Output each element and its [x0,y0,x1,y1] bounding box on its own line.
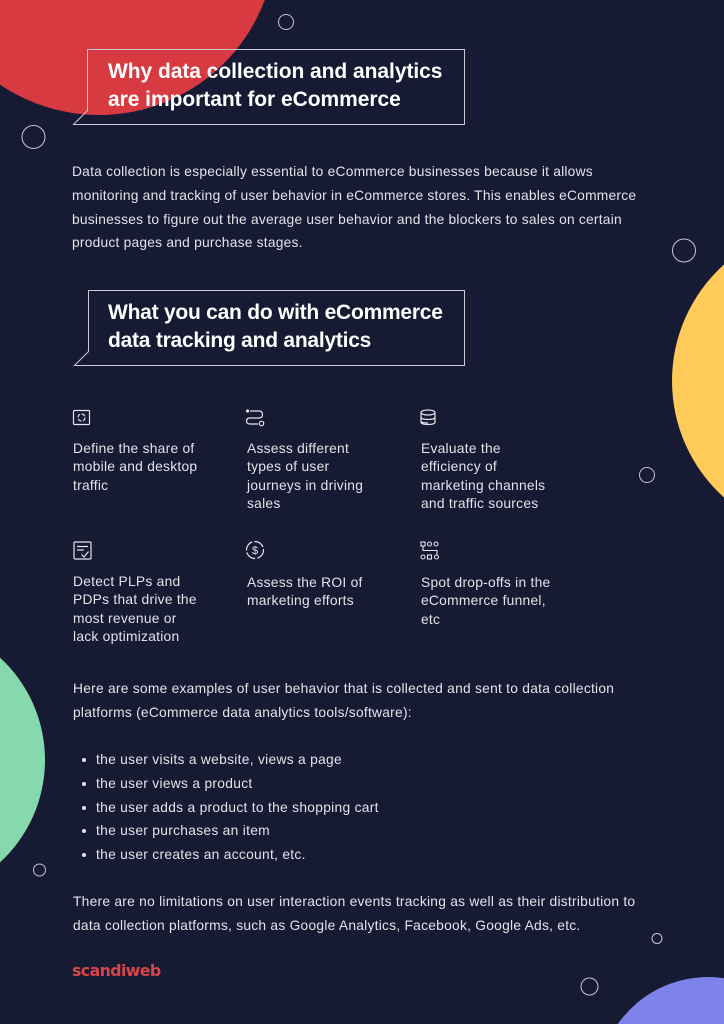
bullet list: the user purchases an item [96,823,270,838]
feature: ROI: marketing efforts [247,593,354,608]
feature: ROI [247,575,363,608]
feature: journeys: sales [247,496,281,511]
feature: traffic: traffic [73,478,108,493]
bullet list: the user adds a product to the shopping cart [96,800,379,815]
feature: marketing: marketing channels [421,478,545,493]
feature: drop-offs: Spot drop-offs in the [421,575,550,590]
feature: marketing: and traffic sources [421,496,538,511]
examples intro: Here are some examples of user behavior that is collected and sent to data collection [73,681,614,696]
feature: marketing [421,441,545,511]
feature: PLPs: most revenue or [73,611,177,626]
bullet list: the user creates an account, etc. [96,847,306,862]
intro paragraph: product pages and purchase stages. [72,235,303,250]
closing paragraph [73,894,635,933]
closing paragraph: data collection platforms, such as Google Analytics, Facebook, Google Ads, etc. [73,918,581,933]
feature: journeys: types of user [247,459,329,474]
feature: PLPs: Detect PLPs and [73,574,180,589]
bullet list: the user visits a website, views a page [96,752,342,767]
feature: traffic: mobile and desktop [73,459,197,474]
examples intro: platforms (eCommerce data analytics tools/software): [73,705,412,720]
icon: ROI: $ [252,545,258,557]
logo: scandiweb [72,961,161,980]
icon: journey [246,409,264,426]
heading: what you can do: data tracking and analytics [108,329,371,352]
feature: PLPs [73,574,197,644]
icon: checklist [73,541,92,560]
heading: why data collection [108,60,442,111]
feature: journeys [246,441,363,511]
heading: why data collection: Why data collection and analytics [108,60,442,83]
intro paragraph: businesses to figure out the average user behavior and the blockers to sales on certain [72,212,622,227]
feature: traffic [73,441,197,493]
heading: why data collection: are important for eCommerce [108,88,401,111]
icon: ROI [246,540,264,560]
heading: what you can do: What you can do with eCommerce [108,301,443,324]
intro paragraph: Data collection is especially essential to eCommerce businesses because it allows [72,164,593,179]
feature: drop-offs: eCommerce funnel, [421,593,546,608]
feature: PLPs: lack optimization [73,629,179,644]
feature: journeys: journeys in driving [247,478,363,493]
bullet list [82,752,379,862]
closing paragraph: There are no limitations on user interaction events tracking as well as their distribution to [73,894,635,909]
icon: funnel [420,541,439,560]
feature: drop-offs [421,575,550,627]
feature: traffic: Define the share of [73,441,195,456]
feature: marketing: Evaluate the [421,441,501,456]
feature: ROI: Assess the ROI of [247,575,363,590]
examples intro [73,681,614,720]
feature: journeys: Assess different [247,441,349,456]
intro paragraph [72,164,636,250]
bullet list: the user views a product [96,776,253,791]
icon: screen [72,410,90,426]
feature: drop-offs: etc [421,612,440,627]
icon: database [420,409,436,426]
intro paragraph: monitoring and tracking of user behavior in eCommerce stores. This enables eCommerce [72,188,636,203]
heading boxes [72,49,465,366]
feature: PLPs: PDPs that drive the [73,592,197,607]
feature: marketing: efficiency of [421,459,497,474]
heading: what you can do [108,301,443,352]
